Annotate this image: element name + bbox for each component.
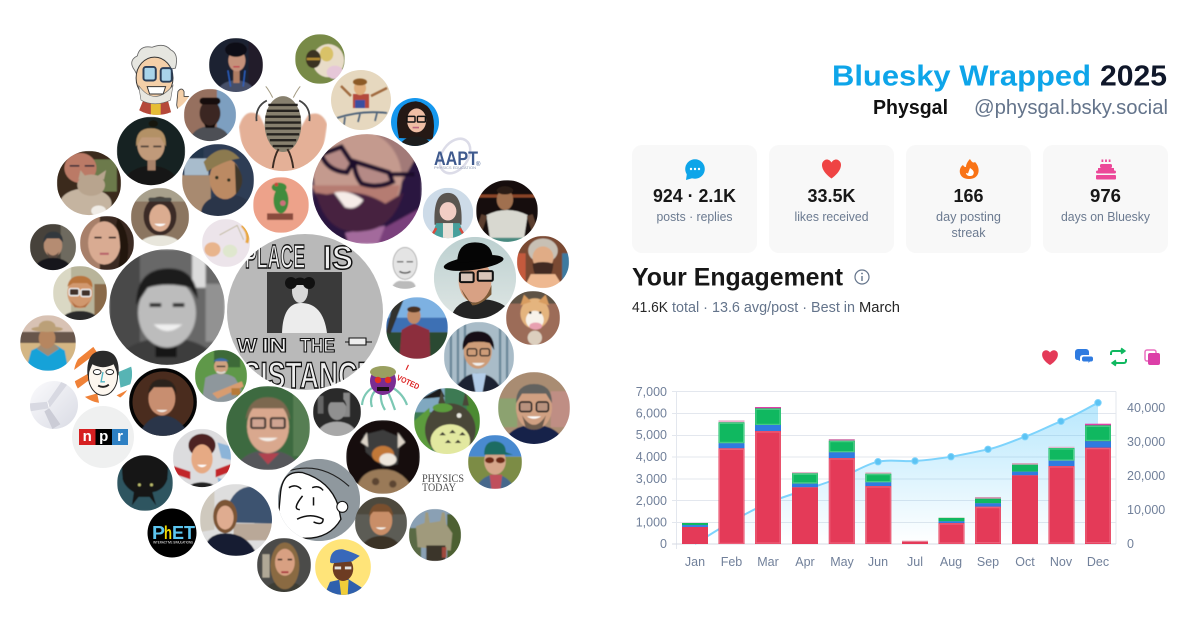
avatar: trilobite in hand bbox=[239, 81, 327, 174]
avatar cluster bbox=[20, 34, 570, 603]
avatar: man in white sunglasses bbox=[53, 266, 107, 320]
icon: flame bbox=[960, 159, 979, 179]
stacked bars bbox=[682, 407, 1111, 544]
title: 2025 bbox=[1100, 60, 1167, 92]
month labels: Nov bbox=[1050, 555, 1073, 569]
avatar: man in cap with guitar bbox=[195, 350, 247, 402]
avatar: woman portrait bbox=[80, 216, 134, 270]
engagement summary: 41.6K bbox=[632, 300, 668, 316]
text: I VOTED: VOTED bbox=[395, 373, 421, 391]
avatar: princess poster: IN bbox=[262, 336, 287, 357]
logo: NPR bbox=[72, 406, 134, 468]
icon: info bbox=[855, 270, 869, 284]
avatar: cartoon child with grey hair bbox=[423, 188, 473, 238]
month labels: Aug bbox=[940, 555, 962, 569]
logo: PhET: INTERACTIVE SIMULATIONS bbox=[153, 540, 194, 544]
panel: days on Bluesky: days on Bluesky bbox=[1061, 209, 1150, 224]
panel: posts and replies: 924 · 2.1K bbox=[653, 186, 736, 206]
avatar: folded envelope bbox=[30, 381, 78, 429]
icon: birthday cake bbox=[1096, 160, 1116, 180]
logo: PhET bbox=[148, 508, 196, 558]
month labels: Mar bbox=[757, 555, 779, 569]
right axis labels: 40,000 bbox=[1127, 401, 1165, 415]
logo: Physics Today: PHYSICS bbox=[422, 471, 464, 485]
month labels: Oct bbox=[1015, 555, 1035, 569]
icon: replies bubbles bbox=[1075, 349, 1094, 364]
panel: days on Bluesky: 976 bbox=[1090, 186, 1121, 206]
avatar: comic face bbox=[278, 459, 360, 541]
avatar: woman with union flag bbox=[173, 429, 231, 494]
text: I VOTED bbox=[395, 361, 426, 391]
right axis labels: 30,000 bbox=[1127, 435, 1165, 449]
panel: day posting streak: day posting bbox=[936, 209, 1001, 224]
avatar: woman on dark background bbox=[209, 38, 263, 92]
logo: PhET: ET bbox=[172, 523, 195, 543]
left axis labels: 5,000 bbox=[636, 428, 667, 442]
line points bbox=[875, 400, 1101, 465]
display name: Physgal bbox=[873, 97, 948, 119]
avatar: bee on flower bbox=[295, 34, 345, 84]
avatar: princess poster: THE bbox=[300, 336, 335, 357]
text: I VOTED: I bbox=[404, 363, 410, 372]
month labels: May bbox=[830, 555, 855, 569]
month labels: Dec bbox=[1087, 555, 1109, 569]
avatar: red panda in armor bbox=[346, 420, 420, 494]
logo: AAPT: ® bbox=[476, 161, 481, 168]
avatar: man in black bowler hat bbox=[434, 237, 516, 319]
avatar: cartoon woman with glasses bbox=[391, 98, 439, 146]
avatar: pencil sketch man bbox=[392, 246, 418, 289]
icon: chat bubble bbox=[685, 159, 705, 180]
icon: quotes squares bbox=[1145, 350, 1160, 365]
bar inner highlights bbox=[720, 432, 1110, 543]
avatar: man in dark ring bbox=[129, 368, 197, 436]
panel: posts and replies bbox=[632, 145, 757, 253]
avatar: smiling woman bbox=[130, 188, 190, 246]
right axis labels: 10,000 bbox=[1127, 503, 1165, 517]
handle: @physgal.bsky.social bbox=[974, 97, 1168, 119]
avatar: man with glasses on foliage bbox=[226, 386, 310, 470]
month labels bbox=[685, 555, 1109, 569]
avatar: man in black and white bbox=[313, 388, 361, 436]
right axis labels: 0 bbox=[1127, 537, 1134, 551]
avatar: pastel drawing bbox=[202, 219, 250, 267]
avatar: cartoon man on yellow bbox=[315, 539, 371, 595]
left axis labels: 1,000 bbox=[636, 516, 667, 530]
engagement summary: March bbox=[859, 300, 900, 316]
cumulative line bbox=[695, 403, 1098, 544]
legend: chart icons bbox=[1042, 348, 1160, 366]
left axis labels: 0 bbox=[660, 537, 667, 551]
logo: AAPT: PHYSICS EDUCATION bbox=[434, 165, 476, 170]
logo: AAPT bbox=[433, 133, 481, 179]
avatar: totoro bbox=[414, 388, 480, 457]
panel: days on Bluesky bbox=[1043, 145, 1168, 253]
avatar: woman in front of observatory dome bbox=[200, 484, 274, 556]
avatar: man in cap bbox=[182, 144, 254, 216]
avatar: princess poster: IS bbox=[323, 239, 353, 276]
avatar: cartoon face with orange stripes bbox=[74, 345, 132, 403]
logo: AAPT: AAPT bbox=[434, 149, 478, 170]
avatar: princess poster: ESISTANCE bbox=[225, 355, 375, 396]
panel: day posting streak: 166 bbox=[954, 186, 984, 206]
icon: likes heart bbox=[1042, 350, 1058, 365]
avatar: bearded man outdoors bbox=[354, 496, 408, 550]
logo: NPR: n bbox=[83, 428, 92, 445]
chart grid bbox=[672, 392, 1116, 549]
avatar: black cat bbox=[117, 455, 173, 511]
left axis labels: 4,000 bbox=[636, 450, 667, 464]
panel: likes received: likes received bbox=[794, 209, 868, 224]
title: Bluesky Wrapped bbox=[832, 60, 1091, 92]
logo: NPR: p bbox=[99, 428, 108, 445]
heading: Your Engagement: Your Engagement bbox=[632, 264, 844, 292]
month labels: Jun bbox=[868, 555, 888, 569]
right axis labels: 20,000 bbox=[1127, 469, 1165, 483]
panel: likes received: 33.5K bbox=[808, 186, 856, 206]
avatar: man with cat bbox=[57, 151, 121, 218]
logo: Physics Today: TODAY bbox=[422, 480, 456, 494]
avatar: man with city background bbox=[184, 88, 236, 142]
month labels: Sep bbox=[977, 555, 999, 569]
avatar: princess poster: W bbox=[237, 336, 257, 357]
panel: likes received bbox=[769, 145, 894, 253]
avatar: man with grey hair bbox=[30, 224, 76, 270]
avatar: purple spider monster bbox=[362, 361, 426, 410]
avatar: wrestler in white shirt bbox=[476, 180, 538, 244]
icon: reposts arrows bbox=[1111, 348, 1126, 366]
engagement summary: total · 13.6 avg/post · Best in bbox=[672, 300, 855, 316]
left axis labels: 6,000 bbox=[636, 406, 667, 420]
avatar: cartoon boy with raised arms bbox=[331, 70, 391, 130]
left axis labels bbox=[636, 385, 667, 551]
panel: posts and replies: posts · replies bbox=[656, 209, 733, 224]
logo: Physics Today bbox=[422, 471, 464, 494]
avatar: shiba dog bbox=[506, 291, 560, 345]
avatar: woman in green cap bbox=[468, 435, 522, 489]
logo: NPR: r bbox=[117, 428, 123, 445]
panel: day posting streak bbox=[906, 145, 1031, 253]
avatar: blonde woman on dark background bbox=[116, 116, 186, 186]
avatar: smiling man in black and white bbox=[109, 249, 225, 365]
avatar: man in red shirt over sea bbox=[386, 297, 448, 359]
avatar: woman with blonde hair bbox=[257, 538, 311, 603]
avatar: cartoon professor bbox=[131, 44, 190, 115]
avatar: man with glasses and suit bbox=[444, 322, 514, 392]
panel: day posting streak: streak bbox=[952, 225, 986, 240]
avatar: princess poster bbox=[225, 234, 383, 396]
avatar: man in hat with blue jacket bbox=[20, 315, 76, 371]
avatar: man with grey hair and navy shirt bbox=[498, 372, 570, 444]
avatar: cartoon bearded man thumbs up bbox=[517, 236, 569, 288]
avatar: frog tattoo bbox=[253, 177, 309, 233]
month labels: Jul bbox=[907, 555, 923, 569]
avatar: stone building bbox=[409, 509, 461, 561]
right axis labels bbox=[1127, 401, 1165, 551]
month labels: Feb bbox=[721, 555, 742, 569]
logo: PhET: P bbox=[152, 523, 165, 543]
left axis labels: 2,000 bbox=[636, 494, 667, 508]
left axis labels: 7,000 bbox=[636, 385, 667, 399]
month labels: Jan bbox=[685, 555, 705, 569]
logo: PhET: h bbox=[164, 523, 172, 543]
left axis labels: 3,000 bbox=[636, 472, 667, 486]
avatar: princess poster: PLACE bbox=[245, 238, 305, 275]
month labels: Apr bbox=[795, 555, 815, 569]
chart: monthly engagement bbox=[636, 385, 1165, 569]
engagement summary bbox=[632, 300, 900, 316]
avatar: large bearded man with glasses bbox=[312, 130, 422, 244]
cumulative area bbox=[695, 403, 1098, 544]
icon: heart bbox=[822, 159, 841, 178]
